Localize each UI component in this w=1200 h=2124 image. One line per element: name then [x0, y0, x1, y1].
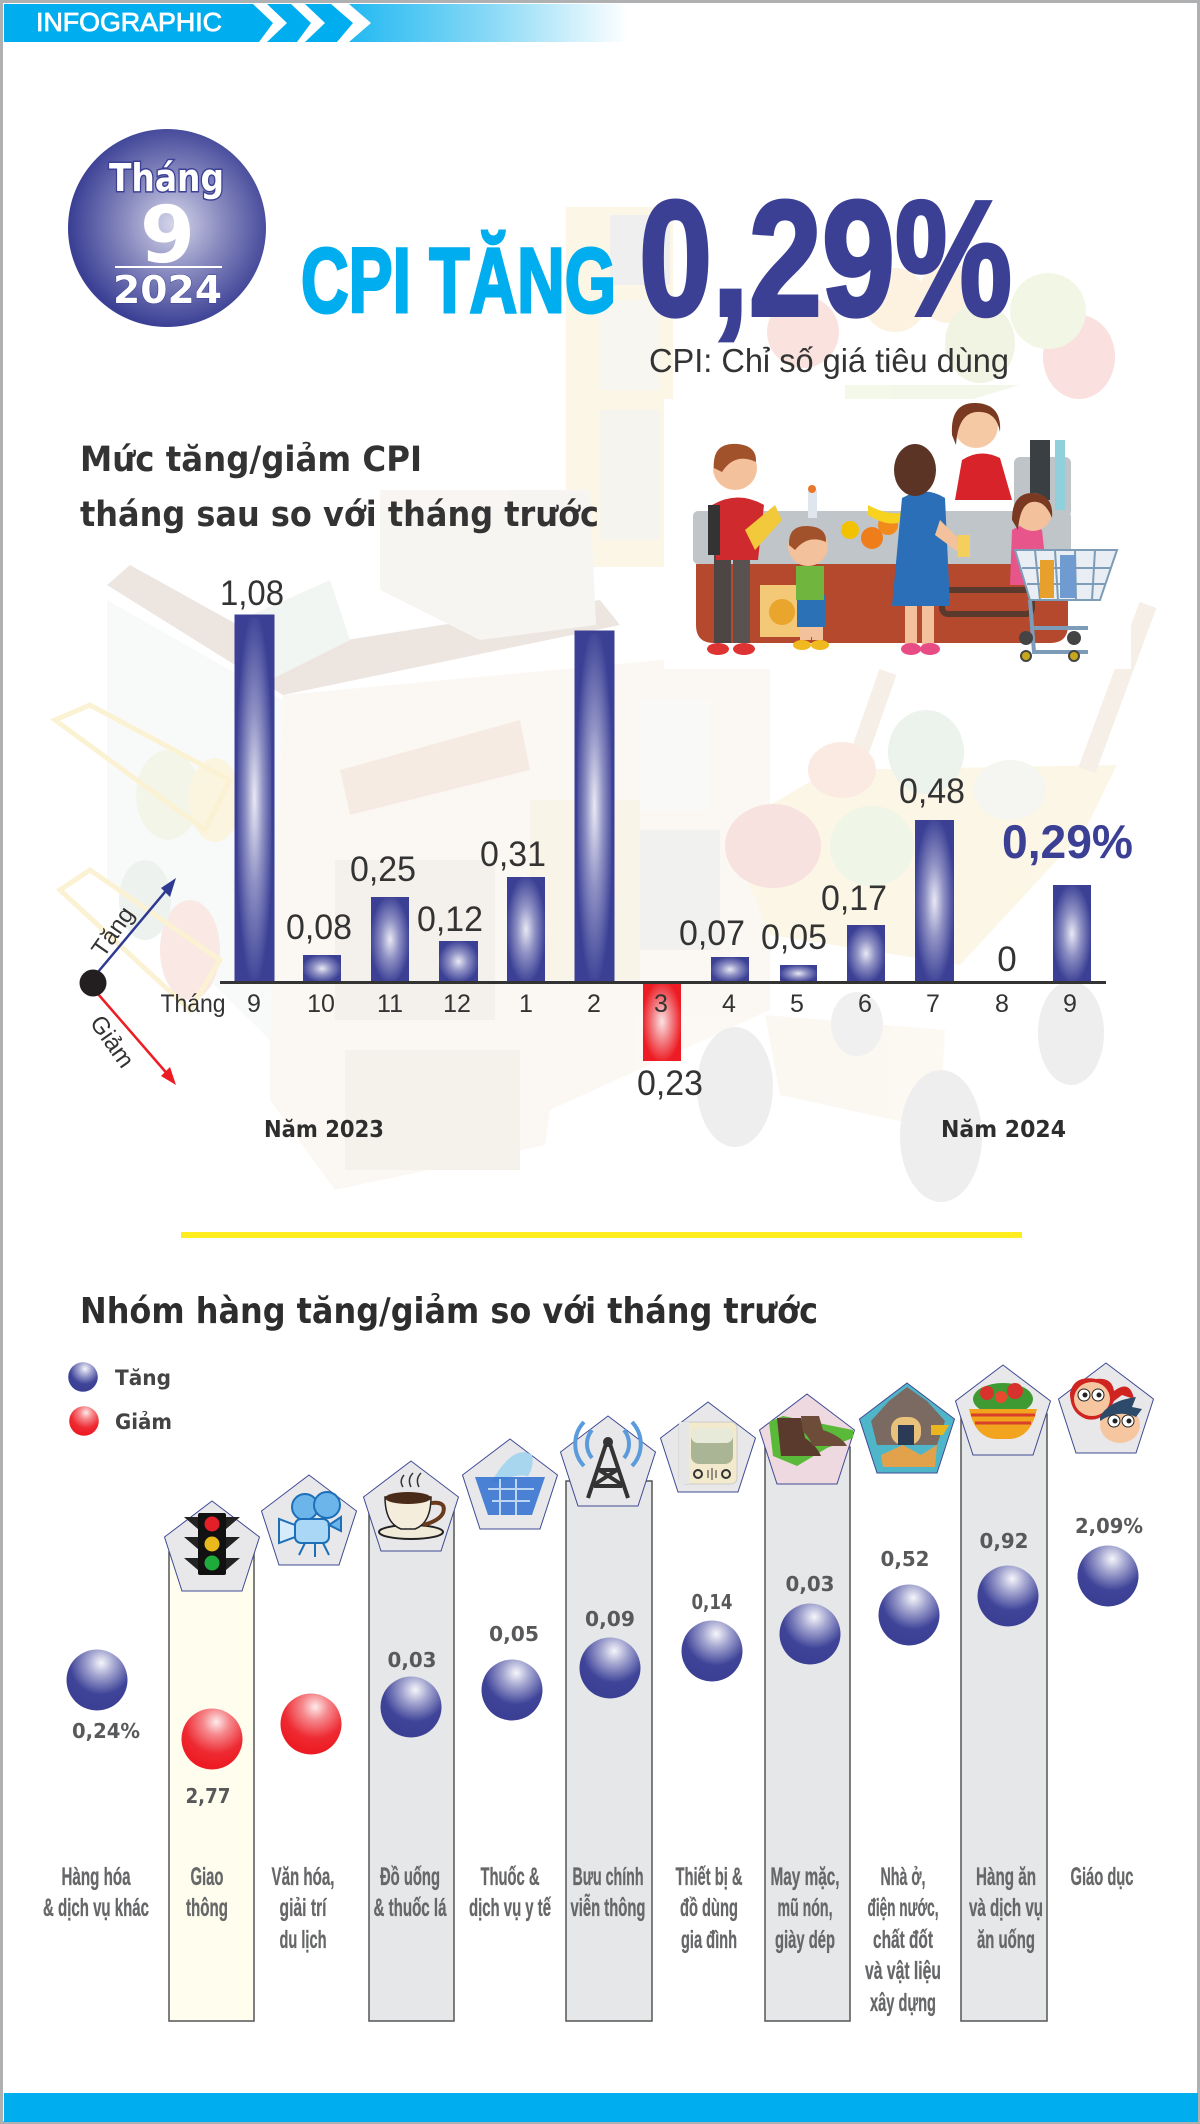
icon: traffic light	[184, 1513, 240, 1575]
group: Bưu chính viễn thông: viễn thông	[570, 1892, 646, 1922]
group: Đồ uống & thuốc lá: & thuốc lá	[374, 1894, 447, 1922]
value labels: 0,07	[679, 914, 745, 953]
illustration: shoppers at checkout	[664, 399, 1131, 669]
fruit	[808, 485, 915, 549]
value labels: 0,17	[821, 879, 887, 918]
icon: coffee cup	[379, 1473, 444, 1539]
register back	[1014, 457, 1071, 517]
month labels: 1	[519, 990, 533, 1018]
group: Giao thông: 2,77	[186, 1784, 230, 1808]
group: Hàng ăn và dịch vụ ăn uống: Hàng ăn	[976, 1863, 1036, 1891]
group: Nhà ở, điện nước, chất đốt và vật liệu xây dựng: Nhà ở,	[880, 1863, 926, 1891]
year labels: Năm 2023	[264, 1117, 384, 1143]
group: May mặc, mũ nón, giày dép	[760, 1394, 854, 1954]
icon: two children	[1070, 1378, 1142, 1443]
header label: INFOGRAPHIC	[36, 7, 222, 37]
month labels: 8	[995, 990, 1009, 1018]
legend: Giảm	[115, 1410, 172, 1434]
month labels: 2	[587, 990, 601, 1018]
value labels: 1,08	[220, 574, 284, 613]
legend: Tăng	[115, 1366, 171, 1390]
value labels: 0,25	[350, 850, 416, 889]
month labels: 9	[247, 990, 261, 1018]
month badge: 2024	[113, 268, 222, 312]
group: Nhà ở, điện nước, chất đốt và vật liệu xây dựng: 0,52	[880, 1547, 930, 1571]
icon: antenna	[575, 1422, 641, 1498]
highlight columns	[169, 1414, 1047, 2021]
group: Đồ uống & thuốc lá: 0,03	[388, 1648, 436, 1672]
title: 0,29%: 0,29%	[639, 167, 1012, 350]
group: Hàng ăn và dịch vụ ăn uống: và dịch vụ	[969, 1894, 1043, 1922]
man	[707, 444, 782, 655]
group: Giáo dục: Giáo dục	[1070, 1863, 1134, 1891]
group: Thiết bị & đồ dùng gia đình: 0,14	[692, 1590, 732, 1614]
value labels: 0,05	[761, 918, 827, 957]
month labels	[160, 990, 1077, 1018]
group: Giáo dục: 2,09%	[1075, 1514, 1143, 1538]
woman in blue	[892, 444, 970, 655]
group: Bưu chính viễn thông: 0,09	[585, 1607, 635, 1631]
bar chart: monthly CPI change	[80, 574, 1133, 1143]
month labels: Tháng	[160, 990, 226, 1018]
month labels: 5	[790, 990, 804, 1018]
group: Hàng ăn và dịch vụ ăn uống: ăn uống	[977, 1926, 1035, 1954]
girl	[1010, 493, 1052, 585]
icon: television	[679, 1422, 737, 1484]
month labels: 3	[654, 990, 668, 1018]
legend	[68, 1362, 172, 1436]
group: Giao thông: thông	[186, 1894, 228, 1922]
header band	[4, 4, 628, 42]
group: Giáo dục	[1058, 1363, 1154, 1891]
bars	[236, 616, 1091, 1061]
group: Đồ uống & thuốc lá	[364, 1461, 458, 1922]
month labels: 11	[377, 990, 403, 1018]
axis	[220, 981, 1106, 984]
group: Văn hóa, giải trí du lịch	[262, 1475, 356, 1954]
group: Thiết bị & đồ dùng gia đình: gia đình	[681, 1926, 737, 1954]
group: Giao thông: Giao	[190, 1863, 224, 1891]
icon: boots	[769, 1416, 853, 1466]
value labels	[220, 574, 1133, 1103]
icon: salad bowl	[969, 1383, 1037, 1439]
arrows and direction labels: Tăng	[86, 902, 140, 962]
group: Nhà ở, điện nước, chất đốt và vật liệu xây dựng	[860, 1383, 954, 2017]
group: Hàng hóa & dịch vụ khác	[43, 1650, 149, 1922]
group: May mặc, mũ nón, giày dép: giày dép	[775, 1926, 835, 1954]
group: Thiết bị & đồ dùng gia đình: Thiết bị &	[676, 1863, 742, 1891]
year labels	[264, 1117, 1066, 1143]
value labels: 0,31	[480, 835, 546, 874]
group: May mặc, mũ nón, giày dép: mũ nón,	[778, 1894, 832, 1922]
group: Văn hóa, giải trí du lịch: giải trí	[280, 1894, 327, 1922]
group: Hàng ăn và dịch vụ ăn uống	[956, 1365, 1050, 1954]
group: Hàng hóa & dịch vụ khác: Hàng hóa	[62, 1863, 131, 1891]
group: Thiết bị & đồ dùng gia đình	[660, 1402, 756, 1954]
heading: monthly CPI: tháng sau so với tháng trước	[80, 495, 599, 535]
group: Bưu chính viễn thông	[560, 1416, 656, 1922]
value labels: 0,23	[637, 1064, 703, 1103]
boy	[788, 526, 829, 650]
group: Nhà ở, điện nước, chất đốt và vật liệu xây dựng: và vật liệu	[865, 1957, 941, 1985]
value labels: 0,29%	[1002, 815, 1133, 868]
group: Hàng hóa & dịch vụ khác: & dịch vụ khác	[43, 1894, 149, 1922]
group: Giao thông	[164, 1501, 260, 1922]
month labels: 4	[722, 990, 736, 1018]
group: Đồ uống & thuốc lá: Đồ uống	[380, 1863, 440, 1891]
group: Thuốc & dịch vụ y tế: Thuốc &	[480, 1863, 540, 1891]
month badge: 9	[140, 191, 195, 281]
icon: medicine basket	[475, 1452, 545, 1515]
heading: monthly CPI	[80, 440, 599, 535]
month labels: 7	[926, 990, 940, 1018]
title: CPI TĂNG: CPI TĂNG	[301, 230, 616, 332]
group: Thiết bị & đồ dùng gia đình: đồ dùng	[680, 1894, 738, 1922]
value labels: 0,12	[417, 900, 483, 939]
month badge	[68, 129, 266, 327]
month labels: 10	[307, 990, 335, 1018]
group: Thuốc & dịch vụ y tế: dịch vụ y tế	[469, 1894, 551, 1922]
month labels: 9	[1063, 990, 1077, 1018]
group: May mặc, mũ nón, giày dép: 0,03	[786, 1572, 834, 1596]
group: Hàng hóa & dịch vụ khác: 0,24%	[72, 1719, 140, 1743]
subtitle: CPI: Chỉ số giá tiêu dùng	[649, 342, 1009, 379]
group: Văn hóa, giải trí du lịch: du lịch	[280, 1926, 326, 1954]
heading: monthly CPI: Mức tăng/giảm CPI	[80, 440, 422, 480]
cashier	[952, 403, 1012, 500]
group: Văn hóa, giải trí du lịch: Văn hóa,	[272, 1863, 334, 1891]
arrows and direction labels	[80, 878, 176, 1085]
icon: film camera	[279, 1492, 341, 1557]
arrows and direction labels: Giảm	[84, 1011, 139, 1073]
year labels: Năm 2024	[941, 1117, 1066, 1143]
group: Nhà ở, điện nước, chất đốt và vật liệu xây dựng: xây dựng	[870, 1989, 936, 2017]
group: May mặc, mũ nón, giày dép: May mặc,	[770, 1863, 840, 1891]
month labels: 12	[443, 990, 471, 1018]
counter	[696, 564, 1068, 643]
value labels: 0	[997, 940, 1017, 979]
icon: mine	[871, 1387, 949, 1467]
group: Hàng ăn và dịch vụ ăn uống: 0,92	[980, 1529, 1028, 1553]
background watermark: toy shop and cart	[55, 207, 1148, 1202]
group: Nhà ở, điện nước, chất đốt và vật liệu xây dựng: chất đốt	[873, 1926, 933, 1954]
group: Thuốc & dịch vụ y tế: 0,05	[489, 1622, 539, 1646]
shopping cart	[1015, 550, 1117, 661]
value labels: 0,08	[286, 908, 352, 947]
footer band	[4, 2093, 1198, 2122]
group: Bưu chính viễn thông: Bưu chính	[572, 1863, 644, 1891]
group: Thuốc & dịch vụ y tế	[462, 1439, 558, 1922]
month labels: 6	[858, 990, 872, 1018]
month badge: Tháng	[109, 156, 224, 200]
value labels: 0,48	[899, 772, 965, 811]
heading: product groups: Nhóm hàng tăng/giảm so với tháng trước	[80, 1291, 818, 1332]
group: Nhà ở, điện nước, chất đốt và vật liệu xây dựng: điện nước,	[868, 1894, 938, 1922]
